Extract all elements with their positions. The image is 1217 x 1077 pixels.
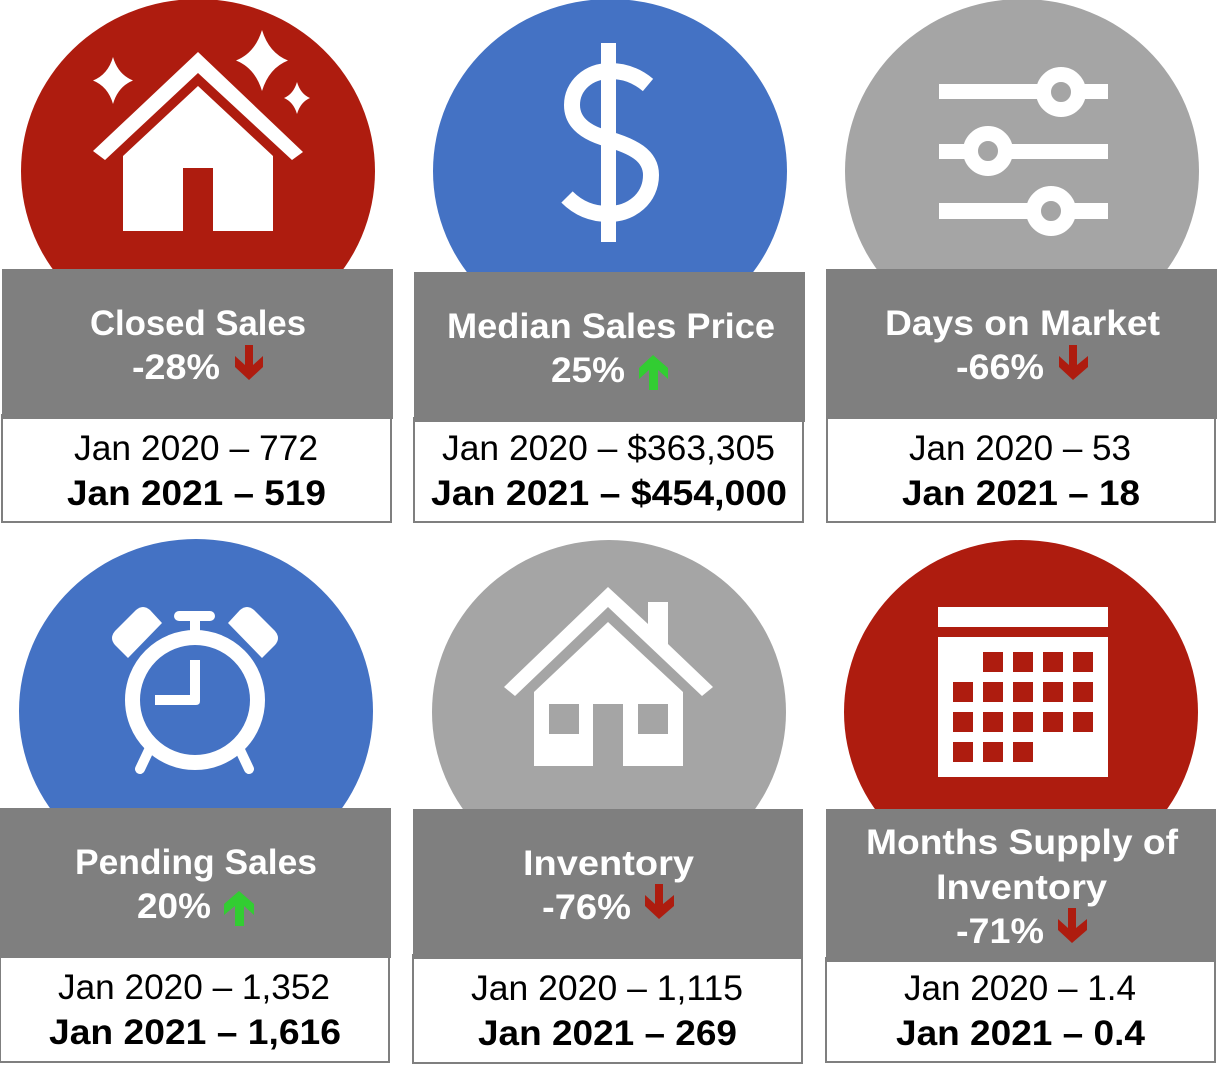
icon: sparkling house — [93, 30, 310, 231]
circle: median sales price — [433, 0, 787, 343]
comparison box: days on market: Jan 2021 – 18 — [902, 474, 1140, 513]
comparison box: months supply of inventory: Jan 2020 – 1.4 — [904, 969, 1136, 1008]
header band: closed sales: Closed Sales — [90, 304, 306, 343]
circle: pending sales — [19, 539, 373, 883]
panel: months supply of inventory — [826, 540, 1216, 1062]
circle: inventory — [432, 540, 786, 884]
panel: inventory — [413, 540, 803, 1063]
header band: months supply of inventory: Inventory — [936, 868, 1108, 907]
panel: days on market — [826, 0, 1217, 522]
icon: alarm clock — [112, 607, 278, 769]
circle: days on market — [845, 0, 1199, 343]
header band: pending sales: 20% — [137, 887, 211, 926]
header band: months supply of inventory: Months Supply of — [866, 823, 1178, 862]
comparison box: inventory: Jan 2020 – 1,115 — [471, 969, 743, 1008]
header band: days on market: Days on Market — [885, 304, 1160, 343]
comparison box: months supply of inventory: Jan 2021 – 0.4 — [896, 1014, 1146, 1053]
comparison box: months supply of inventory — [826, 958, 1215, 1062]
comparison box: closed sales — [2, 415, 391, 522]
comparison box: median sales price: Jan 2021 – $454,000 — [431, 474, 787, 513]
header band: median sales price — [414, 272, 805, 422]
comparison box: pending sales: Jan 2020 – 1,352 — [58, 968, 330, 1007]
comparison box: median sales price — [414, 418, 803, 522]
circle: closed sales — [21, 0, 375, 343]
header band: median sales price: Median Sales Price — [447, 307, 775, 346]
comparison box: inventory — [413, 955, 802, 1063]
header band: months supply of inventory — [826, 809, 1216, 962]
circle: months supply of inventory — [844, 540, 1198, 884]
header band: days on market: -66% — [956, 348, 1044, 387]
header band: months supply of inventory: -71% — [956, 912, 1044, 951]
comparison box: median sales price: Jan 2020 – $363,305 — [442, 429, 775, 468]
header band: inventory: -76% — [542, 888, 631, 927]
header band: closed sales: -28% — [132, 348, 220, 387]
comparison box: days on market — [827, 415, 1215, 522]
comparison box: closed sales: Jan 2021 – 519 — [67, 474, 326, 513]
icon: dollar sign — [567, 43, 651, 242]
comparison box: inventory: Jan 2021 – 269 — [478, 1014, 737, 1053]
icon: sliders — [939, 74, 1108, 228]
panel: median sales price — [414, 0, 805, 522]
comparison box: pending sales — [0, 954, 389, 1062]
comparison box: closed sales: Jan 2020 – 772 — [74, 429, 318, 468]
comparison box: pending sales: Jan 2021 – 1,616 — [49, 1013, 341, 1052]
header band: pending sales: Pending Sales — [75, 843, 317, 882]
comparison box: days on market: Jan 2020 – 53 — [909, 429, 1131, 468]
header band: closed sales — [2, 269, 393, 419]
icon: house with chimney — [504, 587, 713, 766]
header band: inventory: Inventory — [523, 844, 695, 883]
header band: inventory — [413, 809, 803, 959]
icon: calendar — [938, 607, 1108, 777]
panel: closed sales — [2, 0, 393, 522]
header band: median sales price: 25% — [551, 351, 625, 390]
panel: pending sales — [0, 539, 391, 1062]
header band: days on market — [826, 269, 1217, 419]
header band: pending sales — [0, 808, 391, 958]
